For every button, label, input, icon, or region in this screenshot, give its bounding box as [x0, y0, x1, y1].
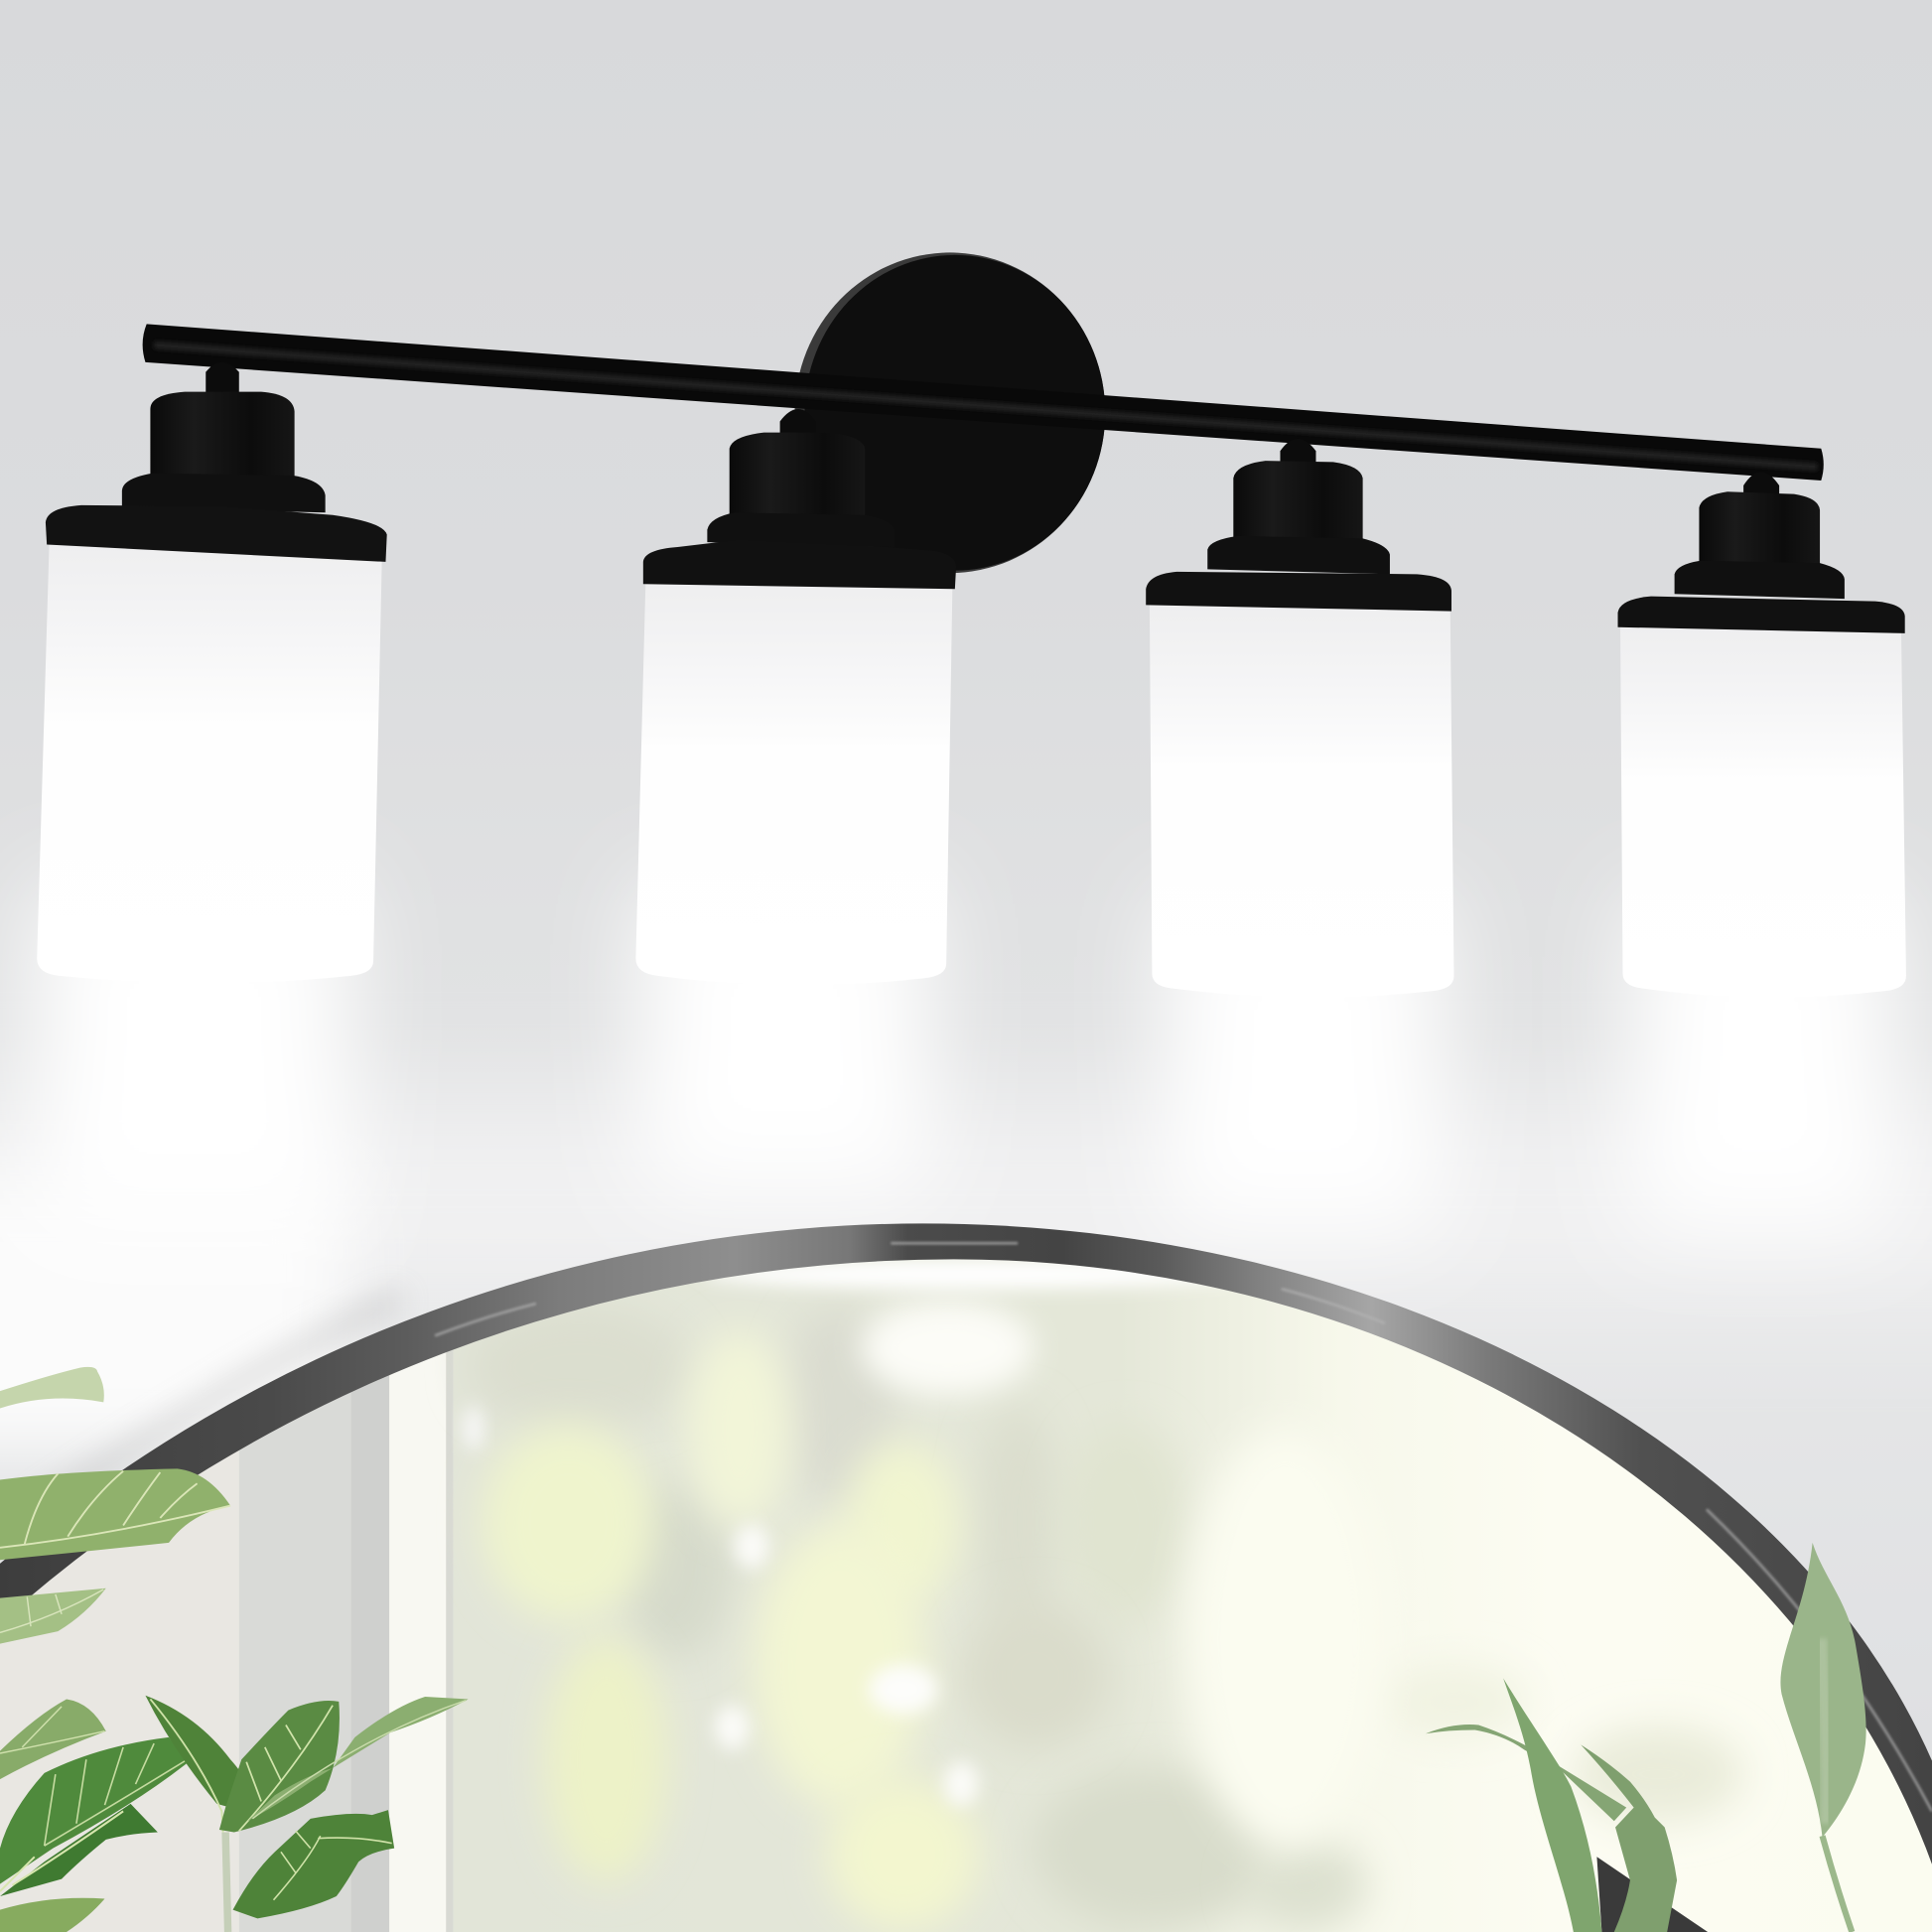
flange 1	[46, 505, 387, 562]
flange 4	[1618, 597, 1905, 633]
lamp 2	[635, 409, 956, 985]
leaf: under frame	[0, 1588, 106, 1644]
leaf: upper right slender	[247, 1697, 469, 1821]
flange 2	[643, 540, 956, 589]
crossbar	[143, 324, 1824, 481]
leaf: lower centre	[233, 1810, 394, 1918]
lamp 4	[1618, 472, 1906, 998]
leaf: thin arching	[1426, 1725, 1626, 1821]
stem 3	[1280, 439, 1315, 466]
frame glints	[435, 1243, 1932, 1811]
round wall backplate	[794, 252, 1105, 573]
leaf highlight	[1821, 1639, 1827, 1824]
dark foliage blurs	[499, 1330, 659, 1402]
plant stem	[225, 1832, 228, 1932]
leaf: large upper	[0, 1468, 230, 1560]
leaf: bottom	[0, 1898, 104, 1932]
cap 2	[730, 433, 865, 522]
stem 4	[1743, 472, 1779, 497]
leaf: pale top	[0, 1367, 104, 1409]
stem 1	[206, 362, 239, 397]
left plant leaves	[0, 1367, 469, 1932]
leaf: dark lower	[0, 1804, 158, 1896]
flange 3	[1146, 572, 1451, 612]
leaf: far left	[0, 1699, 106, 1779]
lamp 1	[37, 362, 387, 983]
right plant leaves	[1426, 1543, 1866, 1932]
cap 1	[150, 392, 295, 483]
step collar 2	[707, 512, 895, 547]
step collar 4	[1675, 561, 1845, 599]
glass shade 2	[635, 582, 952, 985]
yellow foliage blurs	[482, 1425, 654, 1621]
leaf: blade pointed	[1503, 1678, 1601, 1932]
reflected frame segment behind leaves	[1596, 1857, 1708, 1932]
mirror with round black frame	[0, 1223, 1932, 1932]
mirror reflection: window and blurred garden	[0, 1257, 1932, 1932]
leaf: big dark	[0, 1737, 189, 1884]
glass shade 1	[37, 542, 382, 983]
leaf: short blade	[1581, 1744, 1677, 1932]
cap 3	[1233, 461, 1363, 545]
leaf: tall right	[1780, 1543, 1866, 1837]
mirror frame	[0, 1223, 1932, 1864]
glass shade 3	[1150, 604, 1453, 998]
leaf: centre upright	[219, 1701, 340, 1832]
lamp 3	[1146, 439, 1453, 998]
leaf: pointed centre	[145, 1696, 246, 1808]
white highlight blurs	[862, 1302, 1034, 1395]
step collar 1	[122, 474, 326, 512]
cap 4	[1699, 491, 1820, 569]
stem	[1823, 1836, 1852, 1932]
glass shade 4	[1620, 625, 1906, 998]
stem 2	[780, 409, 816, 439]
step collar 3	[1207, 536, 1390, 574]
